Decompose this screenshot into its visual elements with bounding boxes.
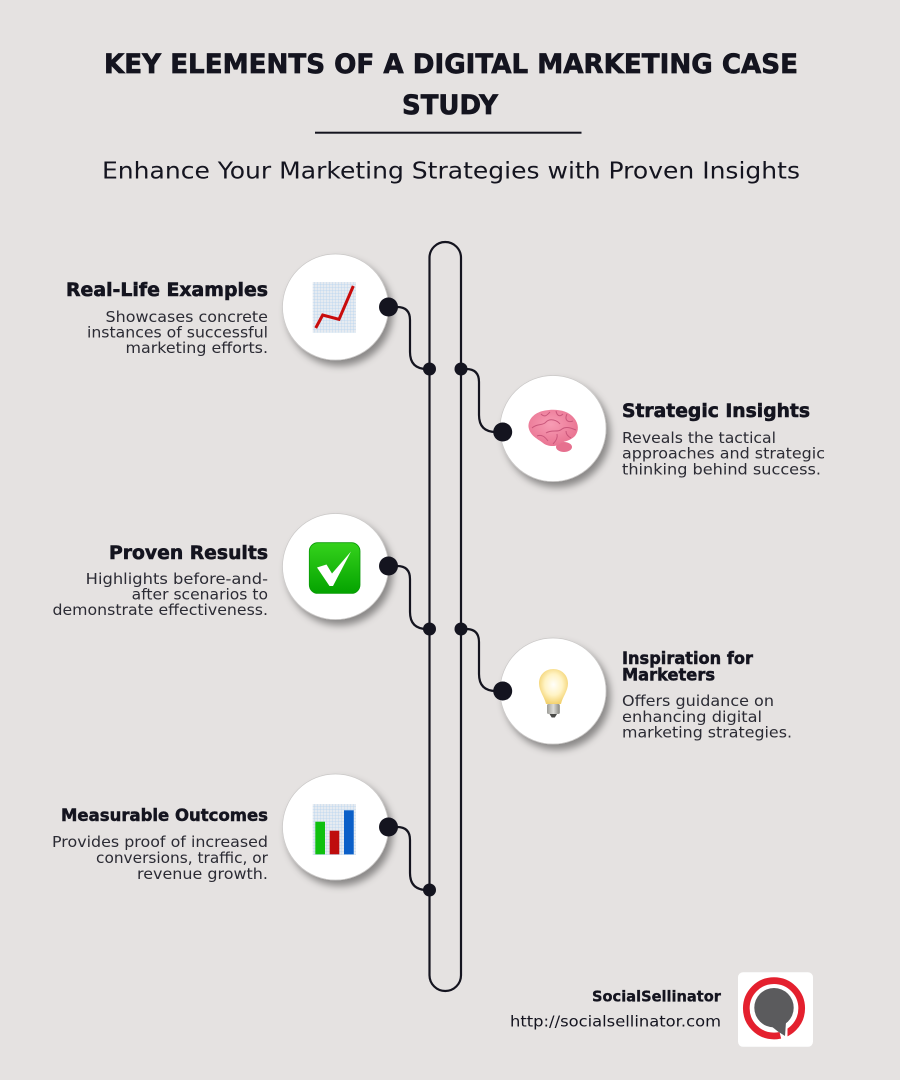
title: [104, 49, 798, 121]
title underline: [315, 132, 582, 134]
panel: proven results: [52, 514, 436, 636]
panel: real-life examples: [66, 254, 436, 376]
subtitle: Enhance Your Marketing Strategies with Proven Insights: [102, 158, 800, 184]
connector: proven results: [388, 566, 430, 629]
text: proven results description: [52, 570, 268, 619]
circle badge: light bulb: [500, 638, 606, 744]
heading: inspiration for marketers: Inspiration for: [622, 649, 754, 669]
rail dot: [423, 622, 436, 636]
circle badge: line chart: [282, 254, 388, 360]
rail dot: [423, 884, 436, 896]
text: proven results description: after scenarios to: [132, 586, 268, 604]
connector: strategic insights: [461, 369, 503, 432]
text: real-life examples description: instances of successful: [87, 324, 268, 342]
connector: real-life examples: [388, 307, 430, 369]
heading: strategic insights: Strategic Insights: [622, 400, 810, 422]
panel: strategic insights: [454, 362, 825, 482]
panel: inspiration for marketers: [454, 622, 792, 744]
footer brand text: [510, 988, 722, 1031]
text: strategic insights description: thinking behind success.: [622, 460, 821, 478]
text: real-life examples description: Showcases concrete: [106, 308, 268, 326]
connector dot: [379, 818, 398, 836]
connector: measurable outcomes: [388, 827, 430, 890]
text: proven results description: demonstrate effectiveness.: [52, 601, 268, 619]
rail dot: [454, 622, 468, 636]
text: measurable outcomes description: revenue growth.: [137, 865, 268, 883]
footer brand text: SocialSellinator: [592, 988, 722, 1006]
panel: measurable outcomes: [52, 774, 436, 896]
heading: proven results: Proven Results: [109, 542, 268, 564]
heading: measurable outcomes: Measurable Outcomes: [61, 806, 268, 826]
text: inspiration description: Offers guidance on: [622, 692, 774, 710]
logo: [738, 972, 813, 1047]
heading: inspiration for marketers: Marketers: [622, 666, 715, 686]
connector dot: [493, 682, 512, 700]
text: real-life examples description: marketing efforts.: [126, 339, 268, 357]
text: proven results description: Highlights before-and-: [86, 570, 268, 588]
text: inspiration description: enhancing digital: [622, 708, 762, 726]
heading: inspiration for marketers: [622, 649, 754, 686]
text: real-life examples description: [87, 308, 268, 357]
circle badge: check mark: [282, 514, 388, 620]
timeline rail: [430, 242, 461, 991]
text: measurable outcomes description: conversions, traffic, or: [96, 849, 269, 867]
text: strategic insights description: Reveals the tactical: [622, 429, 776, 447]
icon: brain: [528, 410, 578, 452]
text: strategic insights description: [622, 429, 825, 478]
icon: rising line chart: [313, 282, 356, 333]
rail dot: [454, 362, 468, 376]
icon: light bulb: [539, 669, 568, 718]
title: STUDY: [402, 90, 498, 121]
connector dot: [493, 422, 512, 442]
connector dot: [379, 556, 398, 576]
text: inspiration description: [622, 692, 792, 742]
heading: real-life examples: Real-Life Examples: [66, 279, 268, 301]
rail dot: [423, 362, 436, 376]
circle badge: brain: [500, 376, 606, 482]
footer brand text: http://socialsellinator.com: [510, 1013, 721, 1031]
connector: inspiration: [461, 629, 503, 691]
text: measurable outcomes description: Provides proof of increased: [52, 833, 268, 851]
icon: green check mark: [309, 543, 360, 593]
connector dot: [379, 298, 398, 316]
circle badge: bar chart: [282, 774, 388, 880]
text: strategic insights description: approaches and strategic: [622, 445, 825, 463]
title: KEY ELEMENTS OF A DIGITAL MARKETING CASE: [104, 49, 798, 80]
icon: bar chart: [313, 804, 356, 855]
text: measurable outcomes description: [52, 833, 269, 883]
text: inspiration description: marketing strategies.: [622, 724, 792, 742]
